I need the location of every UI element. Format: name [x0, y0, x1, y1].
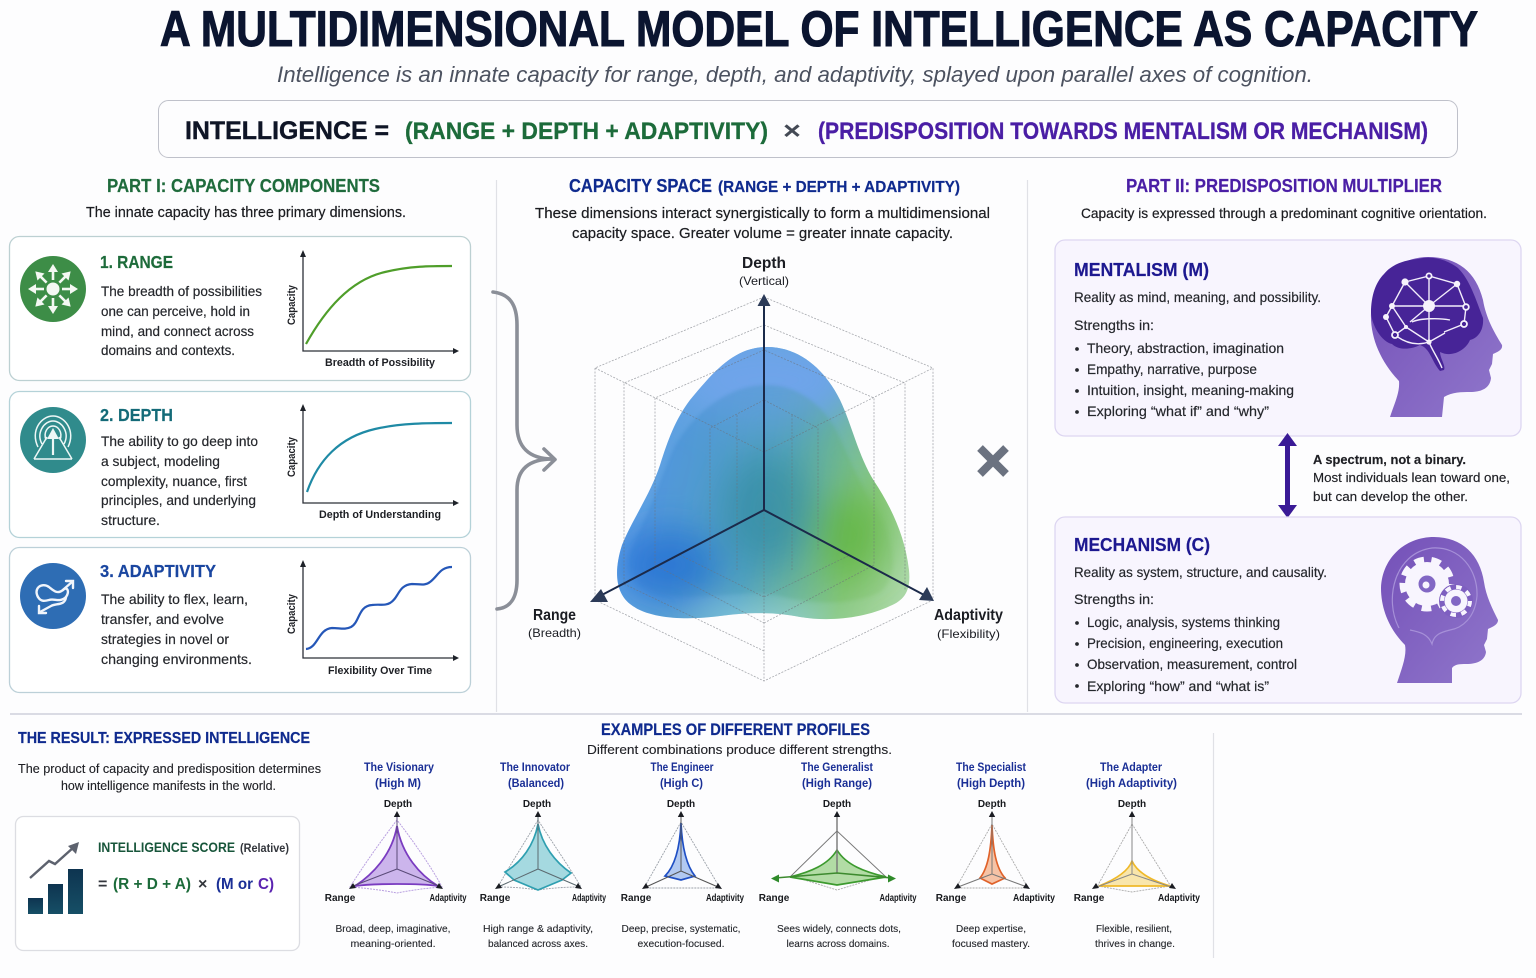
text: mechanism description: Observation, measurement, control: [1087, 656, 1297, 672]
description: adaptivity: transfer, and evolve: [101, 611, 224, 627]
profile: the engineer: execution-focused.: [638, 938, 724, 950]
profile: the adapter: The Adapter: [1100, 762, 1162, 774]
intro text: capacity space: These dimensions interact synergistically to form a multidimensional: [535, 206, 990, 222]
profile: the engineer: Range: [621, 893, 652, 904]
description: range: one can perceive, hold in: [101, 303, 250, 319]
text: mechanism description: Precision, engineering, execution: [1087, 635, 1283, 651]
text: score formula: [98, 876, 274, 893]
axis label: adaptivity: [934, 607, 1003, 641]
text: mentalism description: Reality as mind, meaning, and possibility.: [1074, 289, 1321, 305]
profile: the visionary: Depth: [384, 799, 412, 810]
text: spectrum note: Most individuals lean toward one,: [1313, 470, 1510, 485]
profile: the specialist: Deep expertise,: [956, 923, 1026, 935]
profile: the generalist: Adaptivity: [880, 893, 917, 904]
profile: the innovator: [480, 762, 606, 950]
panel: capacity space: [528, 176, 1003, 681]
chart: depth curve: [286, 404, 459, 521]
text: score formula: (R + D + A): [113, 876, 191, 893]
text: mechanism description: Logic, analysis, systems thinking: [1087, 614, 1280, 630]
axis label: range: [528, 607, 581, 640]
profile: the innovator: Depth: [523, 799, 551, 810]
axis label: depth: [739, 255, 789, 288]
axis: depth: [758, 294, 770, 510]
panel: examples of different profiles: [325, 721, 1200, 950]
profile: the innovator: High range & adaptivity,: [483, 923, 593, 935]
text: mechanism description: [1074, 564, 1327, 694]
description: range: [101, 283, 262, 358]
formula banner: (PREDISPOSITION TOWARDS MENTALISM OR MECHANISM): [818, 118, 1428, 145]
card: depth: [10, 392, 470, 538]
card title: mentalism: MENTALISM (M): [1074, 260, 1209, 280]
profile: the adapter: Range: [1074, 893, 1105, 904]
text: spectrum note: but can develop the other.: [1313, 489, 1468, 504]
text: spectrum note: [1313, 452, 1510, 504]
profile: the adapter: thrives in change.: [1095, 938, 1175, 950]
profile: the generalist: Depth: [823, 799, 851, 810]
subtitle: Intelligence is an innate capacity for range, depth, and adaptivity, splayed upon parallel axes of cognition.: [277, 62, 1313, 87]
chart: adaptivity curve: Capacity: [286, 593, 298, 634]
axis label: adaptivity: (Flexibility): [937, 627, 1000, 641]
axis label: depth: (Vertical): [739, 274, 789, 288]
card: range: [10, 236, 470, 380]
profile: the generalist: [759, 762, 917, 950]
text: mentalism description: Exploring “what if” and “why”: [1087, 403, 1269, 419]
profile: the generalist: Sees widely, connects dots,: [777, 923, 901, 935]
profile: the visionary: The Visionary: [364, 762, 435, 774]
axis label: depth: Depth: [742, 255, 786, 272]
axis: adaptivity: [764, 510, 934, 601]
text: score formula: (M or: [216, 876, 253, 893]
panel: part II predisposition multiplier: [1055, 176, 1521, 703]
text: spectrum note: A spectrum, not a binary.: [1313, 452, 1466, 467]
profile: the engineer: Depth: [667, 799, 695, 810]
description: range: domains and contexts.: [101, 342, 235, 358]
text: mentalism description: Intuition, insight, meaning-making: [1087, 382, 1294, 398]
heading: part I: PART I: CAPACITY COMPONENTS: [107, 176, 380, 196]
grid: hexagonal axes: [595, 297, 933, 681]
text: mentalism description: Empathy, narrative, purpose: [1087, 361, 1257, 377]
description: adaptivity: The ability to flex, learn,: [101, 591, 248, 607]
axis label: range: Range: [533, 607, 576, 624]
chart: range curve: [286, 250, 459, 369]
profile: the generalist: (High Range): [802, 778, 872, 790]
profile: the innovator: The Innovator: [500, 762, 570, 774]
arrow: spectrum double arrow: [1278, 433, 1297, 518]
profile: the specialist: focused mastery.: [952, 938, 1030, 950]
description: depth: principles, and underlying: [101, 492, 256, 508]
chart: adaptivity curve: [286, 560, 459, 677]
arrow: brace into capacity space: [493, 292, 555, 609]
profile: the specialist: The Specialist: [956, 762, 1026, 774]
axis label: adaptivity: Adaptivity: [934, 607, 1003, 624]
profile: the visionary: Range: [325, 893, 356, 904]
description: depth: The ability to go deep into: [101, 433, 258, 449]
heading: part II: PART II: PREDISPOSITION MULTIPLIER: [1126, 176, 1442, 196]
card title: mechanism: MECHANISM (C): [1074, 535, 1210, 555]
profile: the engineer: (High C): [660, 778, 703, 790]
text: score formula: =: [98, 876, 107, 893]
icon: adaptivity arrows: [20, 563, 86, 629]
description: range: The breadth of possibilities: [101, 283, 262, 299]
intro text: part II: Capacity is expressed through a predominant cognitive orientation.: [1081, 205, 1487, 221]
axis label: range: (Breadth): [528, 626, 581, 640]
profile: the visionary: Adaptivity: [430, 893, 467, 904]
description: adaptivity: changing environments.: [101, 651, 252, 667]
profile: the adapter: (High Adaptivity): [1086, 778, 1177, 790]
profile: the engineer: Adaptivity: [706, 893, 744, 904]
icon: depth mountain: [20, 407, 86, 473]
icon: head with gears: [1381, 537, 1498, 683]
card: adaptivity: [10, 548, 470, 692]
formula banner: INTELLIGENCE =: [185, 117, 389, 145]
profile: the adapter: [1074, 762, 1200, 950]
card title: depth: 2. DEPTH: [100, 405, 173, 425]
description: adaptivity: strategies in novel or: [101, 631, 229, 647]
description: depth: structure.: [101, 512, 160, 528]
text: mentalism description: Strengths in:: [1074, 317, 1154, 333]
chart: adaptivity curve: Flexibility Over Time: [328, 665, 432, 677]
text: examples subtitle: Different combinations produce different strengths.: [587, 742, 892, 757]
formula banner: [158, 100, 1458, 158]
chart: range curve: Breadth of Possibility: [325, 357, 436, 369]
icon: head with neural network brain: [1371, 257, 1502, 417]
chart: depth curve: Capacity: [286, 436, 298, 477]
text: score formula: C): [258, 876, 274, 893]
card title: adaptivity: 3. ADAPTIVITY: [100, 561, 216, 581]
profile: the specialist: Range: [936, 893, 967, 904]
profile: the innovator: Range: [480, 893, 511, 904]
profile: the engineer: [621, 762, 744, 950]
card: mechanism: [1055, 517, 1521, 703]
icon: rising bars and arrow: [28, 842, 83, 914]
profile: the adapter: Adaptivity: [1158, 893, 1200, 904]
text: mechanism description: Exploring “how” and “what is”: [1087, 678, 1269, 694]
text: result description: [18, 762, 321, 793]
chart: range curve: Capacity: [286, 284, 298, 325]
profile: the innovator: Adaptivity: [572, 893, 606, 904]
formula banner: (RANGE + DEPTH + ADAPTIVITY): [405, 118, 768, 145]
description: range: mind, and connect across: [101, 323, 254, 339]
profile: the adapter: Flexible, resilient,: [1096, 923, 1172, 935]
axis: range: [590, 510, 764, 602]
heading: examples: EXAMPLES OF DIFFERENT PROFILES: [601, 721, 870, 739]
profile: the generalist: learns across domains.: [786, 938, 890, 950]
description: depth: complexity, nuance, first: [101, 473, 247, 489]
text: result description: The product of capacity and predisposition determines: [18, 762, 321, 776]
description: adaptivity: [101, 591, 252, 667]
chart: depth curve: Depth of Understanding: [319, 509, 441, 521]
text: mentalism description: [1074, 289, 1321, 419]
description: depth: [101, 433, 258, 528]
text: score formula: ×: [198, 876, 207, 893]
text: score label: (Relative): [240, 843, 289, 855]
profile: the innovator: balanced across axes.: [488, 938, 588, 950]
profile: the specialist: (High Depth): [957, 778, 1025, 790]
profile: the visionary: [325, 762, 467, 950]
radar: capacity volume: [590, 294, 934, 681]
heading: capacity space: (RANGE + DEPTH + ADAPTIVITY): [718, 179, 960, 196]
intro text: capacity space: [535, 206, 990, 242]
blob: capacity volume: [617, 347, 910, 620]
intro text: capacity space: capacity space. Greater volume = greater innate capacity.: [572, 226, 953, 242]
profile: the generalist: The Generalist: [801, 762, 873, 774]
text: result description: how intelligence manifests in the world.: [61, 779, 276, 793]
panel: part I capacity components: [10, 176, 470, 692]
profile: the engineer: The Engineer: [650, 762, 714, 774]
text: mentalism description: Theory, abstraction, imagination: [1087, 340, 1284, 356]
card title: range: 1. RANGE: [100, 252, 173, 272]
text: mechanism description: Reality as system, structure, and causality.: [1074, 564, 1327, 580]
icon: range arrows: [20, 256, 86, 322]
profile: the visionary: (High M): [375, 778, 421, 790]
icon: multiply sign: [980, 448, 1006, 474]
heading: capacity space: [569, 176, 960, 196]
intro text: part I: The innate capacity has three primary dimensions.: [86, 205, 406, 221]
profile: the visionary: Broad, deep, imaginative,: [336, 923, 450, 935]
profile: the specialist: Adaptivity: [1013, 893, 1055, 904]
text: score label: INTELLIGENCE SCORE: [98, 840, 235, 855]
profile: the innovator: (Balanced): [508, 778, 564, 790]
profile: the adapter: Depth: [1118, 799, 1146, 810]
heading: capacity space: CAPACITY SPACE: [569, 176, 712, 196]
formula banner: ×: [783, 117, 801, 145]
card: mentalism: [1055, 240, 1521, 436]
profile: the specialist: [936, 762, 1055, 950]
description: depth: a subject, modeling: [101, 453, 220, 469]
panel: the result: [16, 730, 321, 950]
profile: the visionary: meaning-oriented.: [350, 938, 436, 950]
text: mechanism description: Strengths in:: [1074, 591, 1154, 607]
profile: the engineer: Deep, precise, systematic,: [622, 923, 740, 935]
profile: the generalist: Range: [759, 893, 790, 904]
heading: the result: THE RESULT: EXPRESSED INTELLIGENCE: [18, 730, 310, 747]
card: intelligence score: [16, 816, 300, 950]
profile: the specialist: Depth: [978, 799, 1006, 810]
